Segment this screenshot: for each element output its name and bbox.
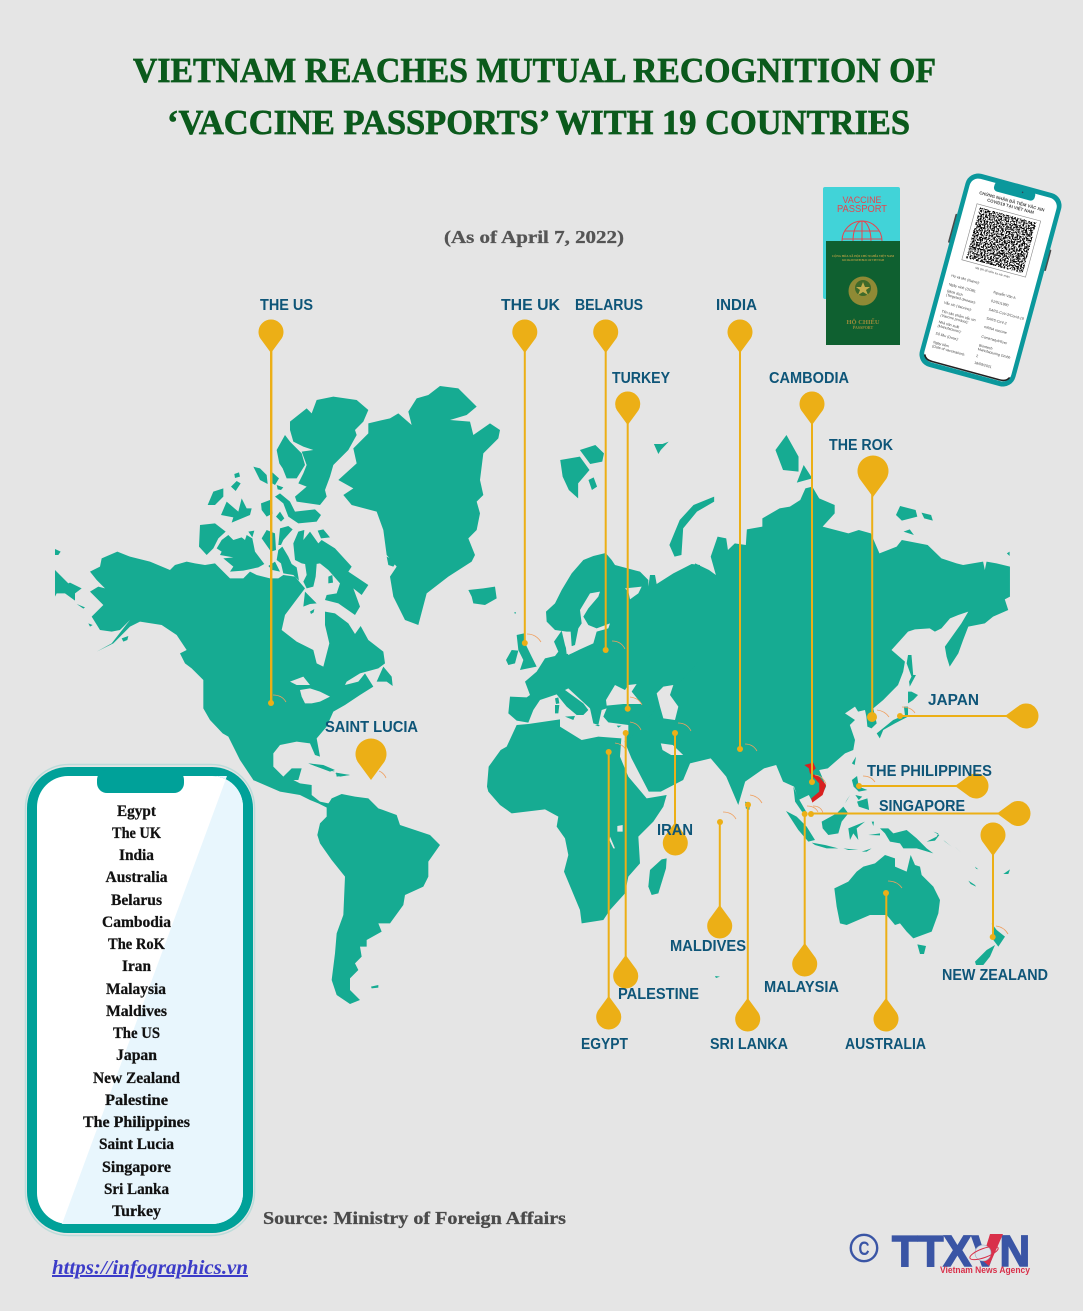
- pin: Iran: [657, 723, 693, 855]
- country list: Saint Lucia: [99, 1136, 174, 1153]
- illustration: vaccine passport and Vietnamese passport: CỘNG HÒA XÃ HỘI CHỦ NGHĨA VIỆT NAM: [832, 253, 895, 258]
- logo: TTXVN Vietnam News Agency: Vietnam News Agency: [940, 1265, 1030, 1275]
- pin: Belarus: [575, 297, 643, 653]
- country list: The UK: [112, 825, 161, 842]
- illustration: phone with vaccine certificate: Ngày tiêm: [933, 340, 949, 348]
- title: ‘VACCINE PASSPORTS’ WITH 19 COUNTRIES: [167, 103, 910, 142]
- illustration: phone with vaccine certificate: Tên sản phẩm vắc xin: [941, 308, 976, 322]
- pin: Malaysia: MALAYSIA: [764, 979, 839, 996]
- pin: New Zealand: [942, 823, 1048, 984]
- illustration: phone with vaccine certificate: Bệnh dịch: [947, 289, 963, 297]
- pin: Maldives: [670, 812, 746, 955]
- pin: Palestine: [613, 722, 699, 1003]
- illustration: vaccine passport and Vietnamese passport: PASSPORT: [837, 203, 888, 215]
- illustration: phone with vaccine certificate: Comirnaty/Pfizer: [981, 335, 1008, 346]
- illustration: vaccine passport and Vietnamese passport: VACCINE: [842, 195, 882, 206]
- pin: The US: [258, 297, 313, 706]
- illustration: phone with vaccine certificate: (Vaccine product):: [940, 313, 969, 325]
- illustration: phone with vaccine certificate: (Manufacturer):: [937, 324, 962, 334]
- country list: Sri Lanka: [104, 1181, 169, 1198]
- pin: Cambodia: [769, 370, 849, 785]
- map: Europe: [506, 553, 700, 740]
- date subtitle: (As of April 7, 2022): [444, 227, 624, 248]
- country list: Belarus: [111, 892, 162, 909]
- pin: Iran: IRAN: [657, 822, 693, 839]
- pin: The UK: THE UK: [501, 297, 560, 314]
- logo: TTXVN Vietnam News Agency: TTXVN: [892, 1227, 1030, 1276]
- pin: The RoK: [829, 437, 893, 722]
- illustration: vaccine passport and Vietnamese passport: SOCIALIST REPUBLIC OF VIET NAM: [842, 258, 884, 262]
- country list: [83, 803, 190, 1220]
- illustration: phone with vaccine certificate: Ngày sinh (DOB):: [948, 282, 977, 294]
- illustration: phone with vaccine certificate: Mã QR để kiểm tra xác nhận: [975, 266, 1011, 279]
- map: Vietnam highlighted: [804, 763, 826, 803]
- panel: phone with list of 19 countries: [26, 764, 254, 1236]
- illustration: phone with vaccine certificate: 18/09/2021: [974, 361, 992, 369]
- pin: India: INDIA: [716, 297, 757, 314]
- country list: New Zealand: [93, 1070, 180, 1087]
- illustration: phone with vaccine certificate: Manufacturing Gmbh: [977, 347, 1011, 360]
- country list: Maldives: [106, 1003, 167, 1020]
- pin: Singapore: [808, 798, 1030, 826]
- country list: Malaysia: [106, 981, 166, 998]
- source text: Source: Ministry of Foreign Affairs: [263, 1208, 566, 1228]
- illustration: phone with vaccine certificate: (Date of vaccination):: [932, 344, 965, 357]
- illustration: vaccine passport and Vietnamese passport: [823, 187, 900, 345]
- illustration: phone with vaccine certificate: (Targeted disease):: [946, 293, 976, 305]
- illustration: phone with vaccine certificate: CHỨNG NHẬN ĐÃ TIÊM VẮC XIN: [979, 190, 1045, 213]
- map: Southeast Asia and Oceania: [715, 807, 1010, 978]
- pin: Malaysia: [764, 806, 839, 996]
- pin: Turkey: TURKEY: [612, 370, 670, 387]
- world map: [55, 386, 1010, 1004]
- pin: Saint Lucia: SAINT LUCIA: [325, 719, 418, 736]
- country list: Cambodia: [102, 914, 171, 931]
- illustration: phone with vaccine certificate: Số liều (Dose):: [935, 332, 959, 342]
- pin: Palestine: PALESTINE: [618, 986, 699, 1003]
- title: [133, 51, 936, 142]
- pin: Egypt: [581, 743, 628, 1053]
- illustration: phone with vaccine certificate: COVID19 TẠI VIỆT NAM: [987, 197, 1035, 215]
- pin: The Philippines: THE PHILIPPINES: [867, 763, 992, 780]
- illustration: phone with vaccine certificate: SARS-CoV-2: [986, 316, 1007, 326]
- illustration: phone with vaccine certificate: Nhà sản xuất: [938, 320, 960, 329]
- title: VIETNAM REACHES MUTUAL RECOGNITION OF: [133, 51, 936, 90]
- country list: The Philippines: [83, 1114, 190, 1131]
- map: North America, Greenland, Arctic: [55, 386, 500, 780]
- pin: The RoK: THE ROK: [829, 437, 893, 454]
- illustration: phone with vaccine certificate: Nguyễn Văn A: [993, 289, 1017, 300]
- illustration: phone with vaccine certificate: Họ và tên (Name):: [951, 274, 980, 285]
- pin: Turkey: [612, 370, 670, 712]
- pin: Australia: [845, 881, 926, 1053]
- pin: The US: THE US: [260, 297, 313, 314]
- country list: Egypt: [117, 803, 157, 820]
- country list: India: [119, 847, 154, 864]
- pin: Japan: [897, 692, 1038, 728]
- illustration: phone with vaccine certificate: [915, 170, 1066, 390]
- pin: The Philippines: [856, 763, 992, 798]
- pin: Singapore: SINGAPORE: [879, 798, 965, 815]
- website link: https://infographics.vn: [52, 1257, 248, 1279]
- map: South America and Africa: [253, 719, 667, 1004]
- pin: Sri Lanka: [710, 795, 788, 1053]
- illustration: phone with vaccine certificate: Biontech: [978, 343, 993, 351]
- pin: Sri Lanka: SRI LANKA: [710, 1036, 788, 1053]
- pin: Maldives: MALDIVES: [670, 938, 746, 955]
- illustration: vaccine passport and Vietnamese passport: HỘ CHIẾU: [846, 318, 880, 326]
- illustration: phone with vaccine certificate: Vắc xin (Vaccine):: [943, 300, 972, 312]
- pin: Egypt: EGYPT: [581, 1036, 628, 1053]
- pin: India: [716, 297, 757, 752]
- pin: New Zealand: NEW ZEALAND: [942, 967, 1048, 984]
- country list: Singapore: [102, 1159, 171, 1176]
- country list: Palestine: [105, 1092, 168, 1109]
- country list: Turkey: [112, 1203, 161, 1220]
- pin: Belarus: BELARUS: [575, 297, 643, 314]
- country list: The RoK: [108, 936, 165, 953]
- country list: The US: [113, 1025, 160, 1042]
- pin: Japan: JAPAN: [928, 692, 979, 709]
- map: Canadian Arctic islands: [199, 467, 368, 615]
- country list: Japan: [116, 1047, 157, 1064]
- pin: Saint Lucia: [325, 719, 418, 780]
- pin: The UK: [501, 297, 560, 646]
- pin: Cambodia: CAMBODIA: [769, 370, 849, 387]
- country list: Australia: [106, 869, 168, 886]
- illustration: phone with vaccine certificate: 01/01/1990: [991, 299, 1009, 308]
- logo: TTXVN Vietnam News Agency: C: [858, 1239, 870, 1260]
- illustration: phone with vaccine certificate: SARS-CoV-2/Covid-19: [988, 308, 1024, 321]
- illustration: phone with vaccine certificate: 2: [976, 354, 979, 358]
- pin: Australia: AUSTRALIA: [845, 1036, 926, 1053]
- illustration: vaccine passport and Vietnamese passport: PASSPORT: [853, 325, 874, 330]
- illustration: phone with vaccine certificate: mRNA vaccine: [983, 325, 1007, 335]
- map: Asia: [560, 435, 1010, 813]
- country list: Iran: [122, 958, 151, 975]
